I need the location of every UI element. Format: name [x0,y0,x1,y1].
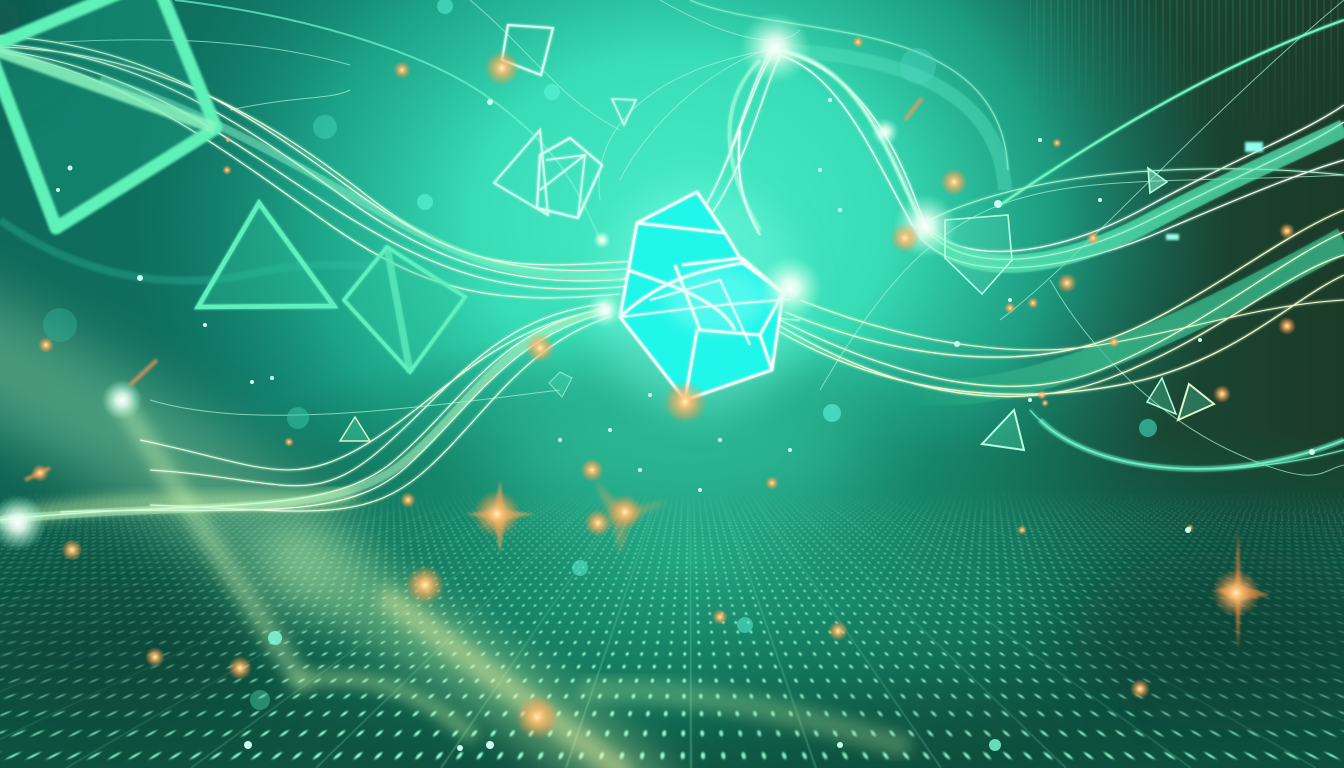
icon: small wireframe cubes upper centre [494,25,636,218]
thin arcs across the scene [60,0,1344,475]
translucent band left [0,220,640,281]
icon: wireframe cube right [945,168,1167,294]
wave bundle: upward loop to right [630,0,1344,272]
diagonal light beams lower left [0,340,900,768]
wave bundle: crystal to lower right [620,210,1344,396]
icon: large square outline top left [0,0,216,228]
icon: triangle left [198,203,334,307]
dark patches on floor [0,550,1344,760]
wave bundle: upper left to crystal [0,36,650,298]
wave bundle: crystal to lower left [0,304,612,520]
glowing nodes [0,12,957,551]
icon: diamond left [344,247,465,372]
dotted perspective floor grid [0,499,1344,768]
icon: small triangles lower right and left [340,372,1214,450]
wave: lower right arc [1030,410,1344,469]
central glowing crystal [595,185,805,415]
